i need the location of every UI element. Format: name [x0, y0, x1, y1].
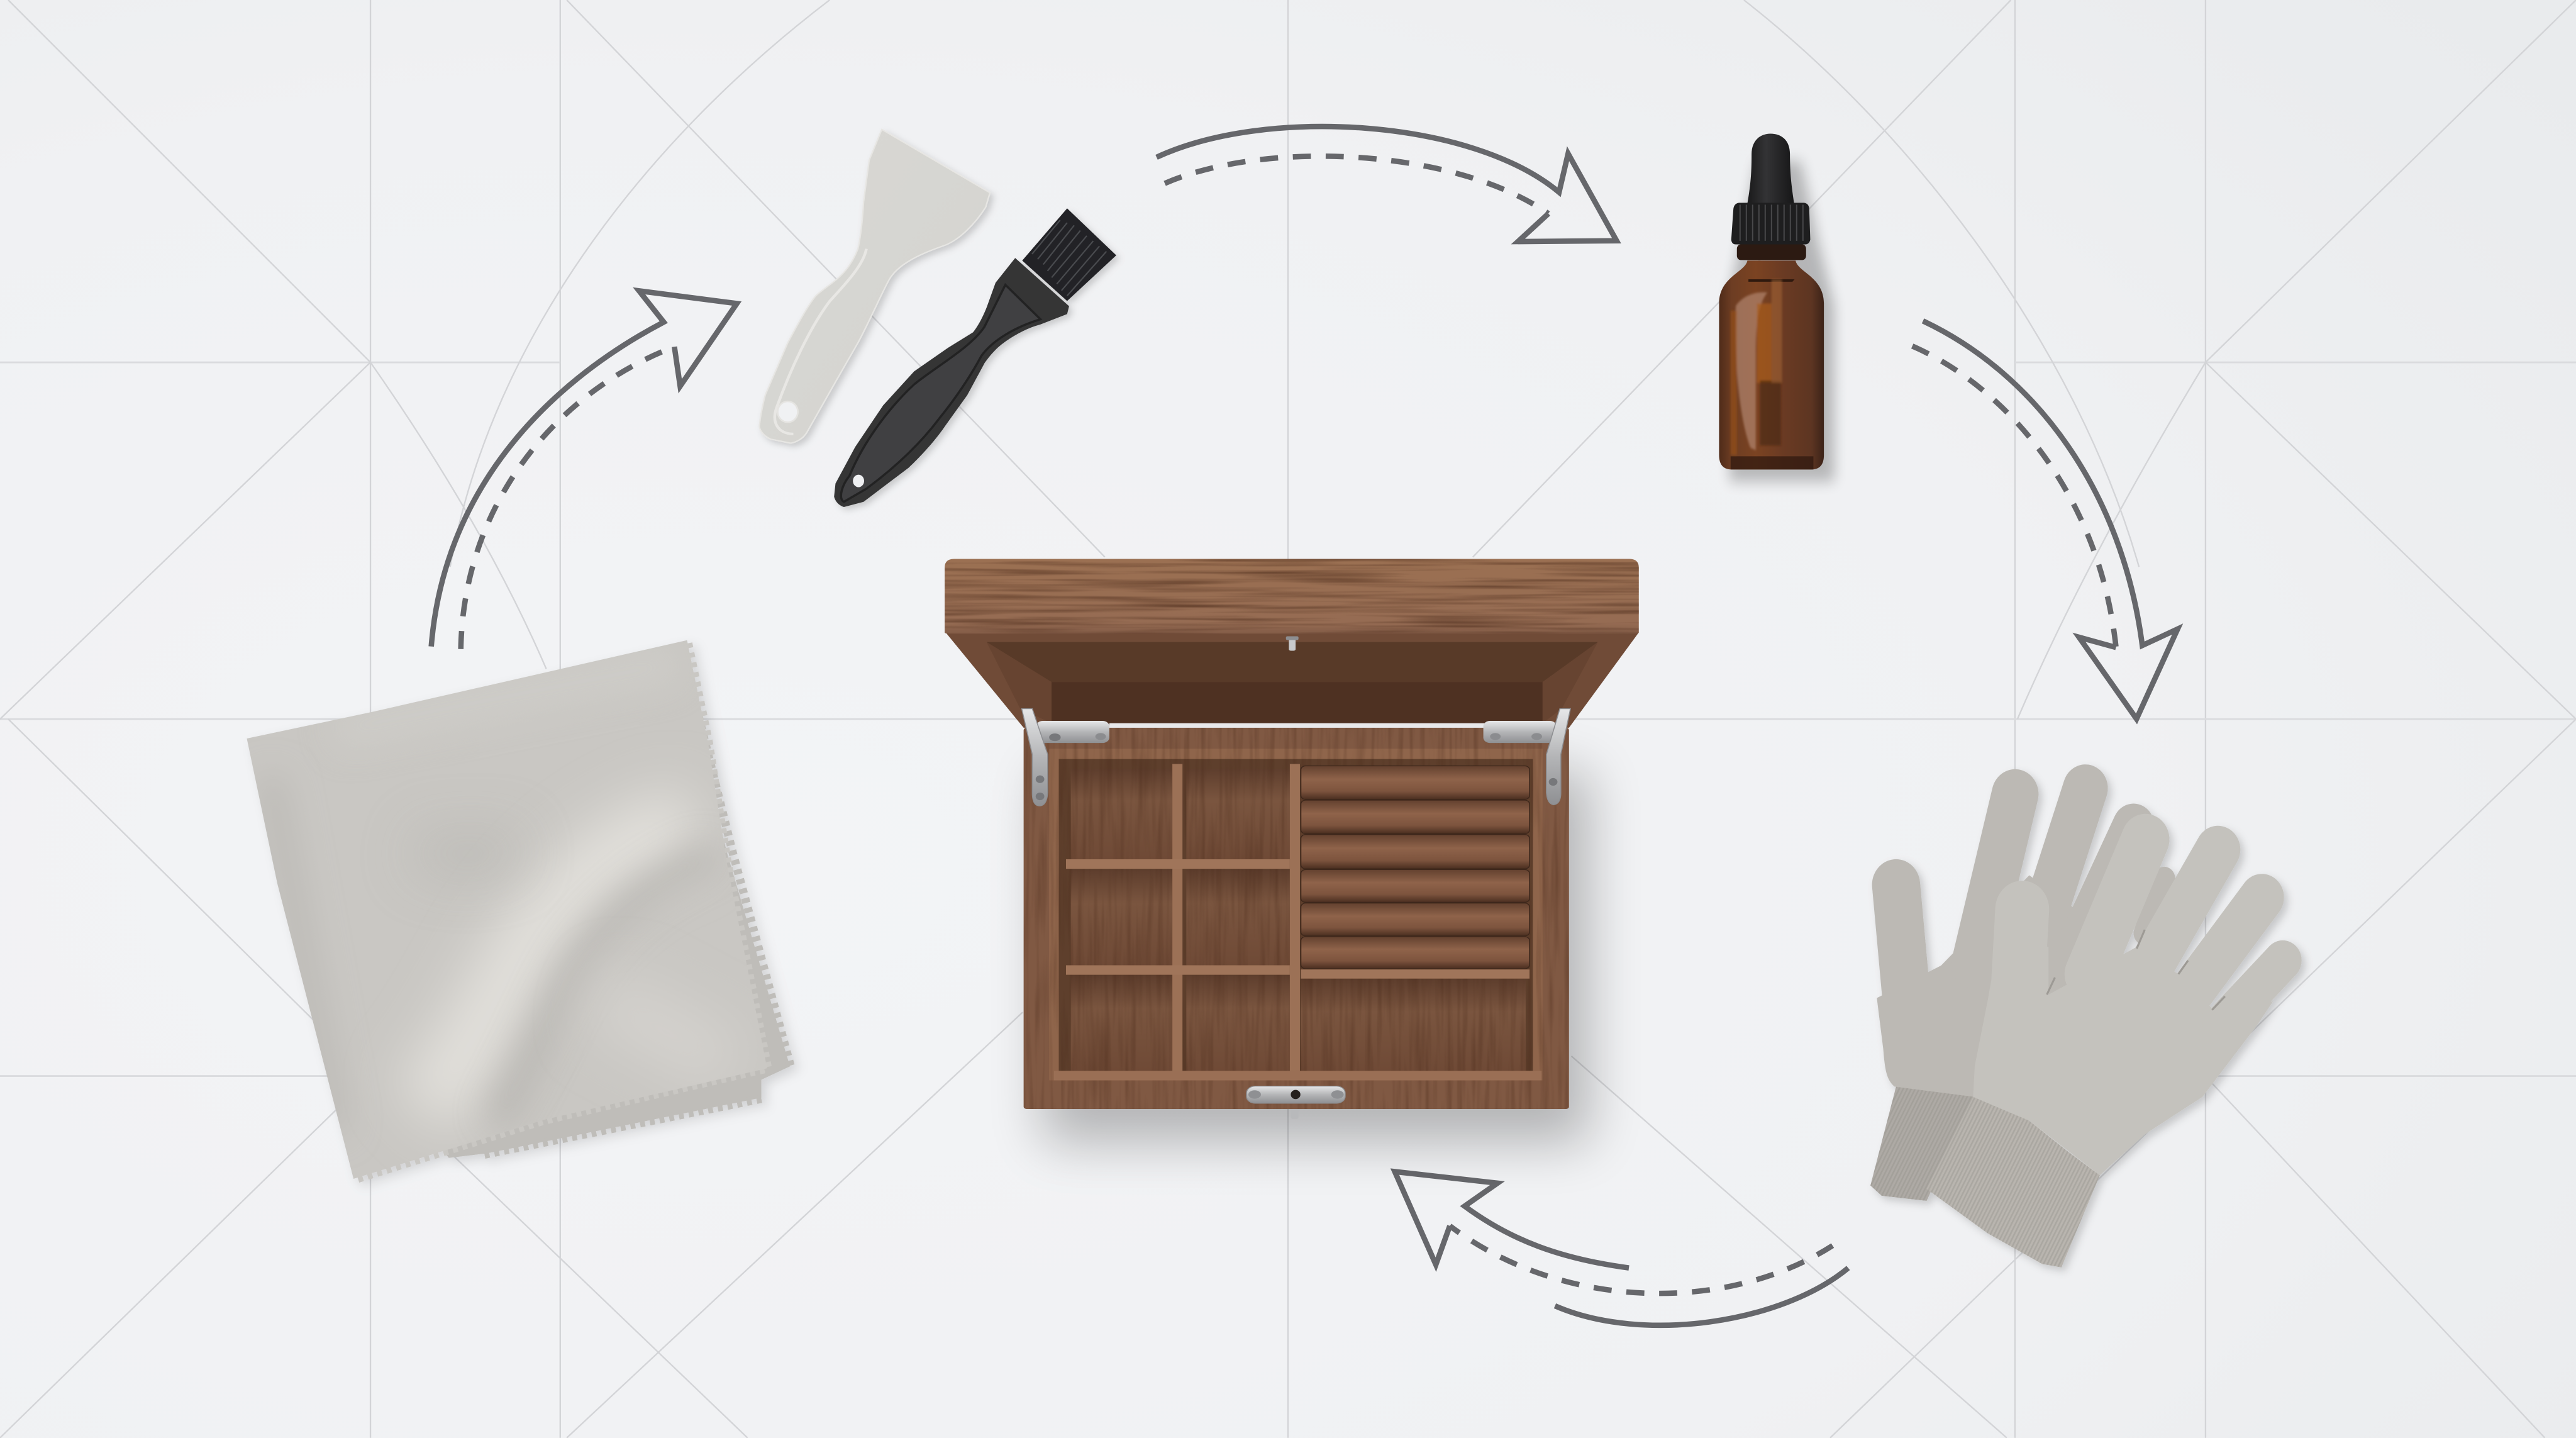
cloth under layer	[411, 700, 791, 1158]
arrow: brush to bottle	[1157, 126, 1616, 242]
right hinge	[1484, 709, 1570, 805]
lid right inner wedge	[1543, 642, 1598, 723]
icon: pair of grey cotton gloves	[1870, 788, 2283, 1268]
compartment row 2 middle	[1186, 869, 1290, 965]
amber glass body	[1719, 260, 1824, 469]
ring rolls	[1301, 766, 1530, 969]
vertical dividers	[1172, 764, 1300, 1071]
compartment row 3 middle	[1186, 975, 1290, 1071]
tray front lip	[1054, 1071, 1541, 1081]
box body	[1024, 728, 1569, 1109]
front latch plate	[1246, 1086, 1345, 1103]
lid side frame	[946, 632, 1639, 728]
lid inner ceiling	[987, 642, 1598, 682]
horizontal dividers	[1066, 859, 1290, 975]
arrow: gloves to box	[1395, 1172, 1848, 1325]
lid back wall	[1049, 682, 1545, 724]
tray frame	[1049, 749, 1543, 1081]
handle	[834, 258, 1069, 507]
icon: amber dropper bottle	[1719, 134, 1835, 482]
scraper body	[760, 130, 990, 443]
roll shelf	[1301, 969, 1530, 979]
white gap between lid and base	[1109, 723, 1485, 728]
tray floor	[1059, 759, 1533, 1071]
lid top face	[945, 559, 1639, 633]
bristles	[1022, 208, 1116, 301]
lid left inner wedge	[987, 642, 1052, 723]
compartment row 1 left	[1071, 769, 1172, 859]
icon: black detail brush	[834, 208, 1116, 507]
arrow: cloth to brush	[431, 291, 737, 649]
compartment row 1 middle	[1186, 769, 1290, 859]
walnut jewellery box	[945, 559, 1639, 1142]
back glove	[1870, 788, 2164, 1201]
compartment row 2 left	[1071, 869, 1172, 965]
icon: plastic scraper	[760, 130, 990, 443]
arrow: bottle to gloves	[1913, 321, 2178, 719]
rubber bulb	[1747, 134, 1794, 203]
lid clasp pin	[1286, 636, 1299, 651]
bottle shadow	[1729, 162, 1835, 482]
bottom clasp pin	[1291, 1109, 1299, 1119]
front glove	[1926, 839, 2283, 1268]
left hinge	[1022, 709, 1109, 806]
box shadow	[1043, 772, 1589, 1142]
compartment row 3 left	[1071, 975, 1172, 1071]
glass neck	[1737, 245, 1806, 260]
icon: microfibre polishing cloth	[247, 640, 791, 1180]
ribbed cap	[1731, 203, 1810, 245]
cloth top layer	[247, 640, 768, 1180]
large compartment	[1301, 979, 1526, 1071]
